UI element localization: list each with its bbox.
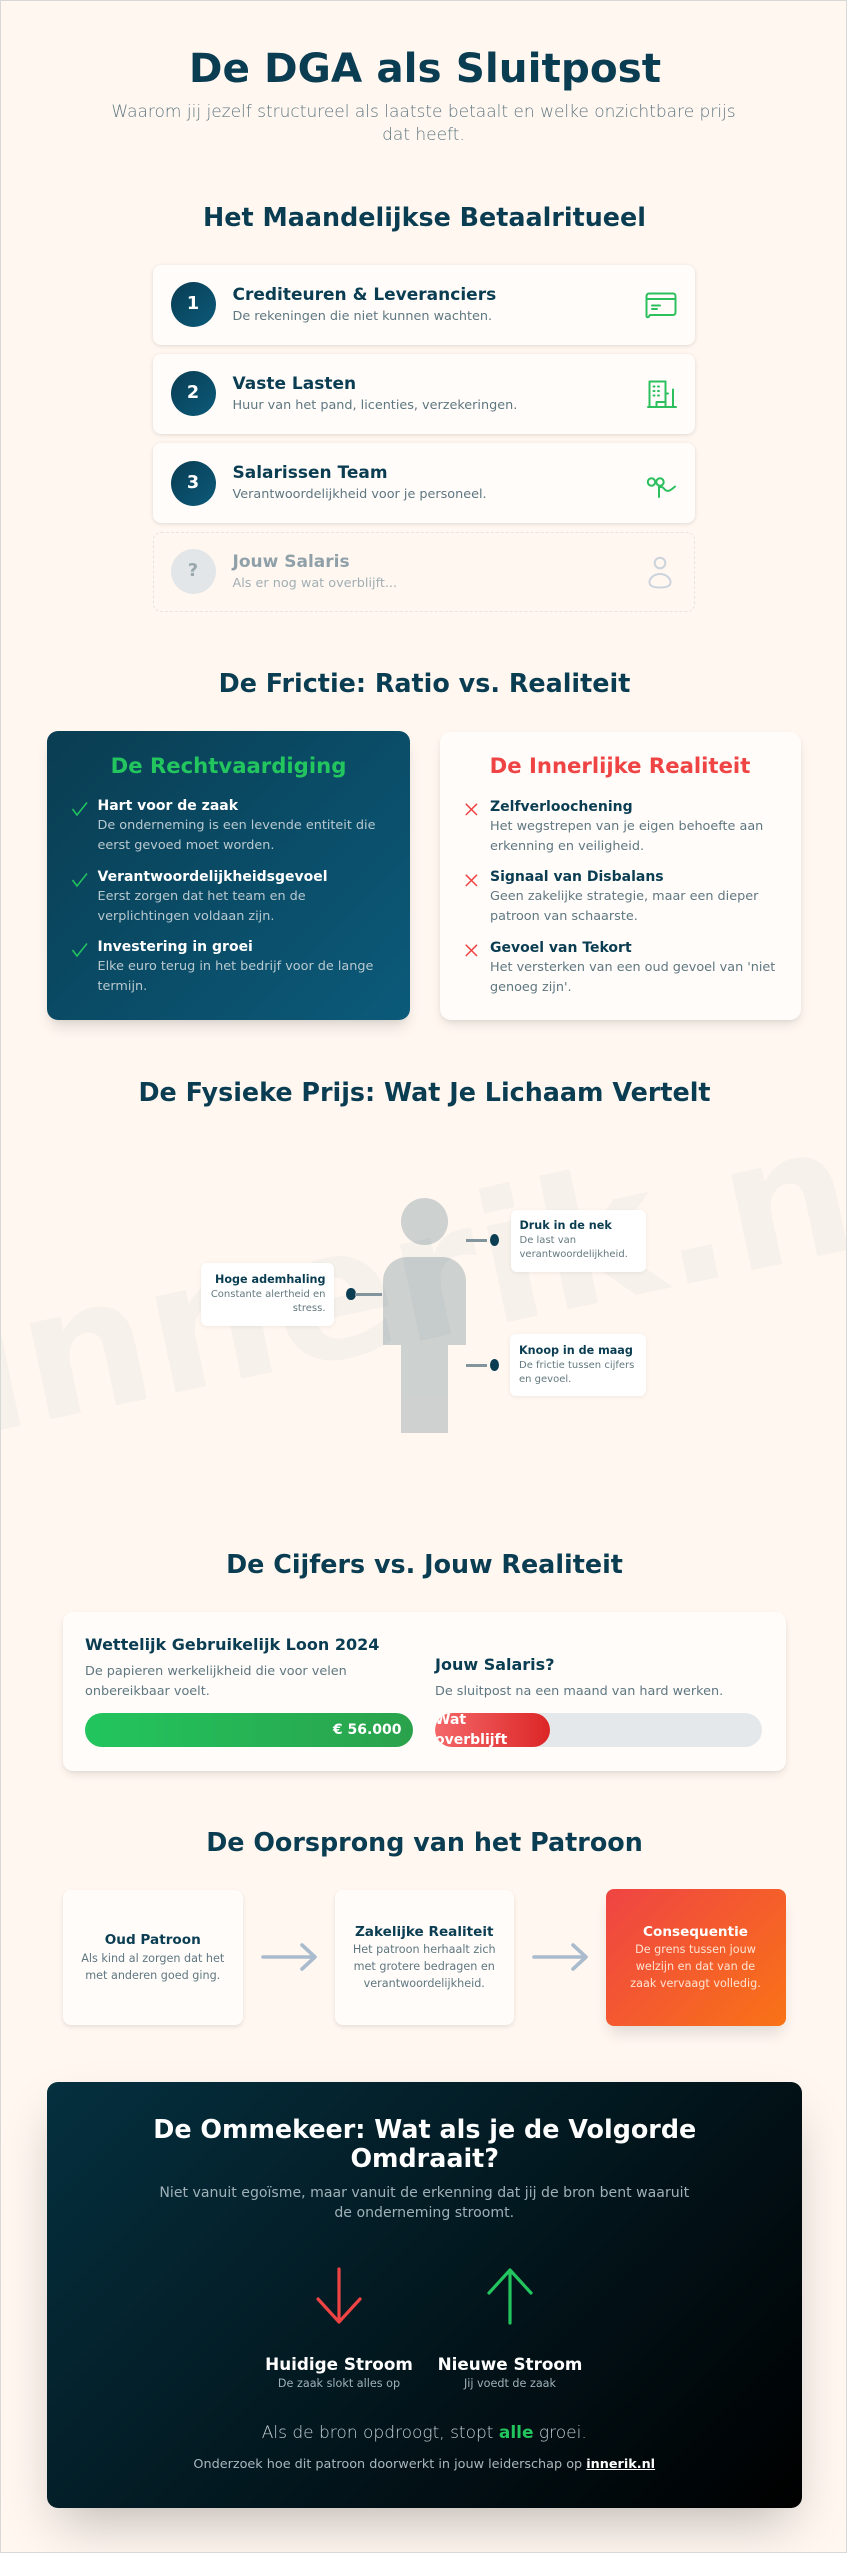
panel: de rechtvaardiging [47, 731, 410, 1020]
panel: payment steps [152, 264, 696, 612]
card [510, 1334, 646, 1396]
card: Hoge ademhaling [215, 1272, 326, 1286]
card: stress. [293, 1303, 326, 1314]
connector [355, 1292, 382, 1296]
heading: De Ommekeer: Wat als je de Volgorde [153, 2114, 696, 2144]
card: Druk in de nek [520, 1218, 612, 1232]
icon: arrow up [487, 2268, 533, 2325]
column: jouw salaris: Jouw Salaris? [435, 1655, 554, 1674]
card [510, 1210, 646, 1272]
item: signaal van disbalans: patroon van schaarste. [490, 909, 638, 924]
item: hart voor de zaak: Hart voor de zaak [98, 798, 238, 814]
icon: check [72, 802, 88, 816]
item: gevoel van tekort [465, 940, 775, 995]
heading: betaalritueel: Het Maandelijkse Betaalritueel [203, 202, 646, 232]
card: oud patroon: Als kind al zorgen dat het [81, 1952, 224, 1964]
intro text: de onderneming stroomt. [334, 2205, 514, 2221]
item: verantwoordelijkheidsgevoel: verplichtingen voldaan zijn. [98, 909, 274, 924]
intro text [159, 2185, 689, 2221]
panel heading: De Rechtvaardiging [111, 753, 346, 778]
icon: cross [465, 944, 478, 956]
step 3: 3 [187, 472, 199, 492]
icon: building [647, 380, 677, 408]
heading [153, 2114, 696, 2172]
item: verantwoordelijkheidsgevoel: Verantwoordelijkheidsgevoel [98, 869, 328, 885]
step 2 [153, 354, 695, 434]
step 1 [153, 264, 695, 344]
figure [383, 1198, 466, 1433]
icon: arrow down [316, 2267, 362, 2324]
column: wettelijk loon: Wettelijk Gebruikelijk Loon 2024 [85, 1635, 379, 1654]
card [201, 1263, 334, 1326]
icon: cross [465, 874, 478, 886]
column: jouw salaris: De sluitpost na een maand van hard werken. [435, 1684, 723, 1699]
step 2: Vaste Lasten [232, 374, 356, 394]
flow: huidige stroom: Huidige Stroom [265, 2354, 413, 2374]
subtitle: dat heeft. [382, 124, 465, 144]
column: jouw salaris [434, 1655, 762, 1747]
card: zakelijke realiteit: Het patroon herhaalt zich [353, 1943, 496, 1956]
card: consequentie: zaak vervaagt volledig. [630, 1977, 761, 1990]
icon: cross [465, 803, 478, 816]
marker [346, 1288, 356, 1300]
arrow [532, 1943, 588, 1971]
flow: nieuwe stroom [438, 2268, 582, 2390]
flow: nieuwe stroom: Nieuwe Stroom [438, 2354, 582, 2374]
card: zakelijke realiteit: Zakelijke Realiteit [355, 1924, 494, 1940]
item: signaal van disbalans [465, 869, 758, 924]
step 3 [153, 443, 695, 523]
arrow [261, 1943, 317, 1971]
item: zelfverloochening: Zelfverloochening [490, 798, 633, 814]
step 2: Huur van het pand, licenties, verzekeringen. [232, 398, 517, 412]
heading: Omdraait? [350, 2142, 499, 2172]
item: gevoel van tekort: genoeg zijn'. [490, 980, 572, 995]
icon: credit card [646, 292, 676, 318]
step 4: Als er nog wat overblijft... [232, 576, 397, 590]
flow: huidige stroom: De zaak slokt alles op [278, 2377, 400, 2390]
item: zelfverloochening: erkenning en veiligheid. [490, 838, 644, 854]
bar: 56000 [85, 1713, 413, 1747]
card: zakelijke realiteit [334, 1890, 514, 2025]
callout: hoge ademhaling [201, 1263, 382, 1327]
bar: 56000: € 56.000 [333, 1722, 402, 1738]
closing statement: Als de bron opdroogt, stopt alle groei. [262, 2423, 587, 2443]
item: signaal van disbalans: Signaal van Disbalans [490, 869, 664, 885]
icon: check [72, 943, 88, 958]
callout: knoop in de maag [466, 1334, 646, 1397]
card: Constante alertheid en [211, 1289, 326, 1300]
item: gevoel van tekort: Gevoel van Tekort [490, 940, 632, 956]
connector [466, 1238, 486, 1242]
intro text: Niet vanuit egoïsme, maar vanuit de erkenning dat jij de bron bent waaruit [159, 2185, 689, 2201]
step 1: Crediteuren & Leveranciers [232, 284, 496, 304]
connector [466, 1364, 486, 1366]
card: oud patroon [63, 1890, 242, 2025]
card: verantwoordelijkheid. [520, 1249, 628, 1260]
subtitle: Waarom jij jezelf structureel als laatste betaalt en welke onzichtbare prijs [111, 102, 736, 122]
icon: team [646, 477, 676, 498]
item: signaal van disbalans: Geen zakelijke strategie, maar een dieper [490, 889, 758, 904]
step 2: 2 [187, 383, 199, 403]
card: en gevoel. [519, 1374, 571, 1385]
card: consequentie: welzijn en dat van de [636, 1960, 755, 1973]
item: gevoel van tekort: Het versterken van een oud gevoel van 'niet [490, 960, 775, 975]
column: wettelijk loon: onbereikbaar voelt. [85, 1684, 210, 1699]
item: hart voor de zaak [72, 798, 375, 853]
card: zakelijke realiteit: met grotere bedragen en [354, 1960, 495, 1973]
item: zelfverloochening [465, 798, 763, 854]
subtitle [111, 102, 736, 144]
heading: cijfers: De Cijfers vs. Jouw Realiteit [226, 1549, 623, 1579]
marker [490, 1234, 499, 1246]
call to action: Onderzoek hoe dit patroon doorwerkt in jouw leiderschap op innerik.nl [193, 2457, 655, 2472]
panel: de innerlijke realiteit [440, 732, 800, 1020]
item: verantwoordelijkheidsgevoel [72, 869, 328, 924]
flow: huidige stroom [265, 2267, 413, 2390]
column: wettelijk loon: De papieren werkelijkheid die voor velen [85, 1664, 347, 1679]
flow: nieuwe stroom: Jij voedt de zaak [464, 2377, 556, 2390]
item: investering in groei: Elke euro terug in het bedrijf voor de lange [98, 959, 373, 974]
item: verantwoordelijkheidsgevoel: Eerst zorgen dat het team en de [98, 889, 306, 904]
column: wettelijk loon [85, 1635, 413, 1747]
step 4: ? [188, 561, 198, 581]
callout: druk in de nek [466, 1210, 646, 1273]
card: oud patroon: Oud Patroon [105, 1932, 201, 1948]
bar: remainder [435, 1713, 762, 1747]
step 1: 1 [187, 294, 199, 314]
step 3: Salarissen Team [232, 463, 388, 483]
step 4: Jouw Salaris [232, 552, 350, 572]
card: oud patroon: met anderen goed ging. [85, 1968, 220, 1982]
item: hart voor de zaak: De onderneming is een levende entiteit die [98, 818, 375, 833]
card: consequentie: Consequentie [643, 1924, 748, 1940]
step 3: Verantwoordelijkheid voor je personeel. [232, 487, 487, 502]
card: De last van [520, 1235, 576, 1246]
card: zakelijke realiteit: verantwoordelijkheid. [364, 1977, 485, 1990]
item: zelfverloochening: Het wegstrepen van je eigen behoefte aan [490, 818, 763, 834]
panel: de ommekeer [47, 2082, 802, 2508]
card: consequentie: De grens tussen jouw [635, 1943, 756, 1956]
item: investering in groei: Investering in groei [98, 939, 253, 955]
item: hart voor de zaak: eerst gevoed moet worden. [98, 838, 274, 853]
title: De DGA als Sluitpost [189, 44, 661, 92]
icon: person [648, 556, 672, 588]
item: investering in groei [72, 939, 373, 994]
item: investering in groei: termijn. [98, 979, 147, 994]
marker [490, 1359, 499, 1371]
icon: check [72, 873, 88, 888]
step 4 [153, 532, 695, 612]
panel: salary comparison [63, 1612, 786, 1771]
card: Knoop in de maag [519, 1344, 633, 1356]
step 1: De rekeningen die niet kunnen wachten. [232, 308, 492, 324]
heading: fysieke prijs: De Fysieke Prijs: Wat Je Lichaam Vertelt [138, 1077, 711, 1107]
card: De frictie tussen cijfers [519, 1360, 634, 1371]
heading: frictie: De Frictie: Ratio vs. Realiteit [219, 668, 630, 698]
card: consequentie [606, 1889, 786, 2026]
body diagram [201, 1198, 646, 1433]
panel heading: De Innerlijke Realiteit [490, 753, 750, 778]
heading: oorsprong: De Oorsprong van het Patroon [206, 1827, 643, 1857]
